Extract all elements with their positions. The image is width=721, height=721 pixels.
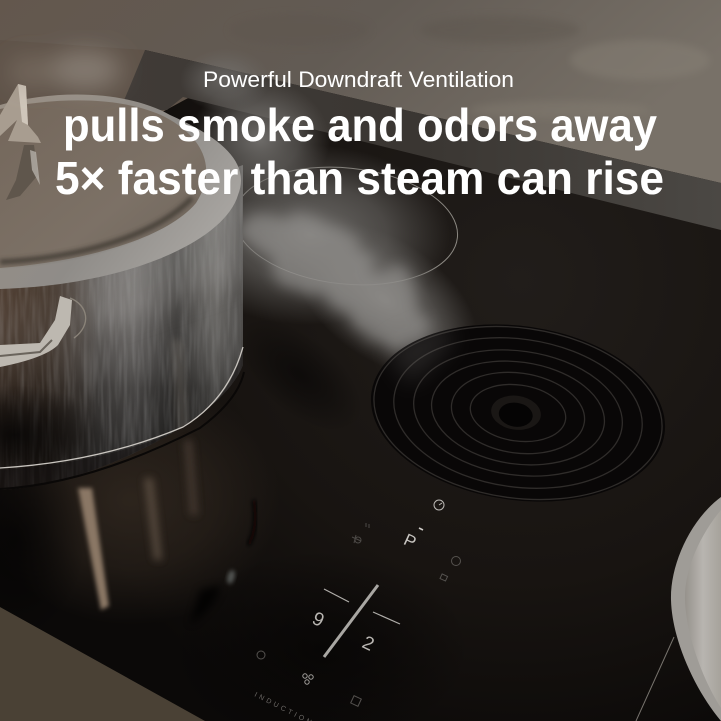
pot body [0,160,245,495]
rising steam, upper left [8,50,121,90]
downdraft vent [359,306,677,520]
lid inner glossy band [0,198,192,262]
dash [419,528,423,530]
lid handle [0,84,41,200]
icon: hood [352,535,361,543]
counter rear left area [0,40,190,200]
icon: timer [434,500,444,510]
digit nine: 9 [309,608,327,632]
vent concentric rings [363,309,673,517]
stock pot [0,84,245,495]
concrete countertop, rear [0,0,721,183]
icon: fan [303,674,313,684]
concrete texture [230,14,710,119]
headline line two: 5× faster than steam can rise [55,152,664,204]
vent centre cap [489,392,543,433]
dark falloff at front of glass [170,550,470,721]
pot reflection on glass [34,422,257,614]
pot side handle [0,296,86,367]
headline [55,99,664,204]
vent steam wisp [385,322,455,385]
pot base dark lip [0,372,244,489]
pot base bright line [0,347,243,468]
slider tick left [324,589,349,602]
icon: small power [452,556,460,566]
induction hob ring [229,157,463,295]
pot lid surface [0,100,206,268]
cooktop rear side band [120,50,721,230]
touch controls [253,500,460,721]
icon: grid [351,696,361,706]
icon: power left [257,651,265,659]
letter P: P [401,530,419,552]
slider tick right [373,612,400,624]
pot lid rim [0,95,241,289]
concrete countertop, front left [0,607,205,721]
glint on glass [226,569,236,585]
subtitle: Powerful Downdraft Ventilation [203,67,514,92]
icon: pause [366,523,369,528]
frying pan, bottom right [671,497,721,721]
cooktop front edge line [636,637,674,721]
icon: lock [440,574,448,581]
steam plume [170,48,505,409]
cooking zone slider [324,585,378,657]
dark shadow under the plume [218,298,382,452]
digit two: 2 [359,632,377,656]
headline line one: pulls smoke and odors away [63,99,657,151]
